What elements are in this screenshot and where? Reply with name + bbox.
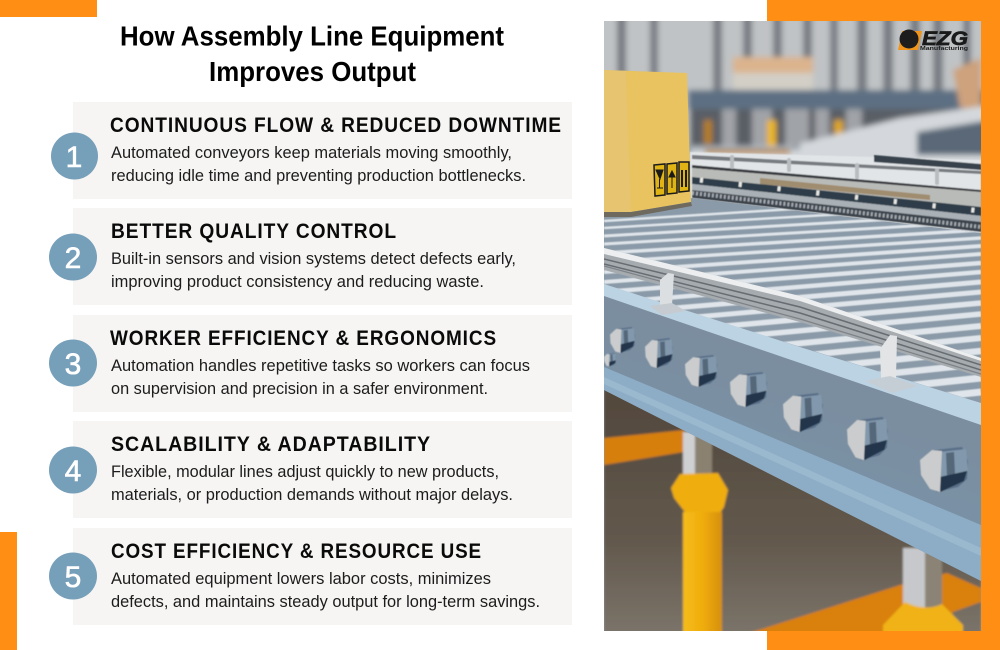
text: quality control description <box>111 250 516 291</box>
text: cost efficiency description: defects, and maintains steady output for long-term savings. <box>111 593 540 611</box>
title <box>120 20 504 87</box>
text: quality control description: improving product consistency and reducing waste. <box>111 273 484 291</box>
text: scalability description <box>111 463 513 504</box>
text: continuous flow description: reducing idle time and preventing production bottlenecks. <box>111 167 526 185</box>
floor and legs <box>604 385 981 640</box>
text: worker efficiency description: Automation handles repetitive tasks so workers can focus <box>111 357 530 375</box>
icon: number 3 badge: 3 <box>65 348 81 381</box>
text: scalability description: Flexible, modular lines adjust quickly to new products, <box>111 463 499 481</box>
text: quality control description: Built-in sensors and vision systems detect defects early, <box>111 250 516 268</box>
logo: Manufacturing <box>920 46 968 52</box>
decorative orange frame: bottom left <box>0 532 17 650</box>
text: cost efficiency description <box>111 570 540 611</box>
logo: EZG <box>922 29 968 50</box>
text: continuous flow description <box>111 144 526 185</box>
heading: scalability: SCALABILITY & ADAPTABILITY <box>111 433 431 456</box>
bolts <box>604 327 968 492</box>
text: scalability description: materials, or production demands without major delays. <box>111 486 513 504</box>
icon: number 2 badge <box>49 234 97 280</box>
heading: continuous flow: CONTINUOUS FLOW & REDUCED DOWNTIME <box>110 114 562 137</box>
icon: number 3 badge <box>49 340 97 386</box>
panel: worker efficiency <box>49 315 572 412</box>
heading: cost efficiency: COST EFFICIENCY & RESOURCE USE <box>111 540 482 563</box>
text: continuous flow description: Automated conveyors keep materials moving smoothly, <box>111 144 512 162</box>
beam <box>604 284 981 581</box>
icon: number 2 badge: 2 <box>65 242 81 275</box>
icon: number 5 badge: 5 <box>65 561 81 594</box>
rail bracket right <box>865 335 918 393</box>
rail bracket left <box>650 273 686 315</box>
photo: conveyor roller line <box>596 10 991 640</box>
text: worker efficiency description <box>111 357 530 398</box>
panel: cost efficiency <box>49 528 572 625</box>
icon: number 1 badge: 1 <box>66 141 82 174</box>
rollers <box>604 198 981 398</box>
side rail <box>604 248 981 377</box>
decorative orange frame: right <box>767 0 1000 650</box>
upper rail section <box>690 152 981 240</box>
heading: quality control: BETTER QUALITY CONTROL <box>111 220 397 243</box>
icon: number 5 badge <box>49 552 97 600</box>
title: Improves Output <box>209 56 416 87</box>
decorative orange frame: top left <box>0 0 97 17</box>
icon: handling labels <box>654 162 689 196</box>
logo <box>898 29 968 52</box>
panel: quality control <box>49 208 572 305</box>
panel: continuous flow <box>51 102 572 199</box>
icon: number 4 badge <box>49 446 97 494</box>
title: How Assembly Line Equipment <box>120 20 504 52</box>
heading: worker efficiency: WORKER EFFICIENCY & ERGONOMICS <box>110 327 497 350</box>
icon: number 1 badge <box>51 132 98 180</box>
background corrugated wall <box>604 21 981 166</box>
icon: number 4 badge: 4 <box>65 455 81 488</box>
text: cost efficiency description: Automated equipment lowers labor costs, minimizes <box>111 570 491 588</box>
panel: scalability <box>49 421 572 518</box>
cardboard box <box>604 70 692 217</box>
text: worker efficiency description: on supervision and precision in a safer environment. <box>111 380 488 398</box>
